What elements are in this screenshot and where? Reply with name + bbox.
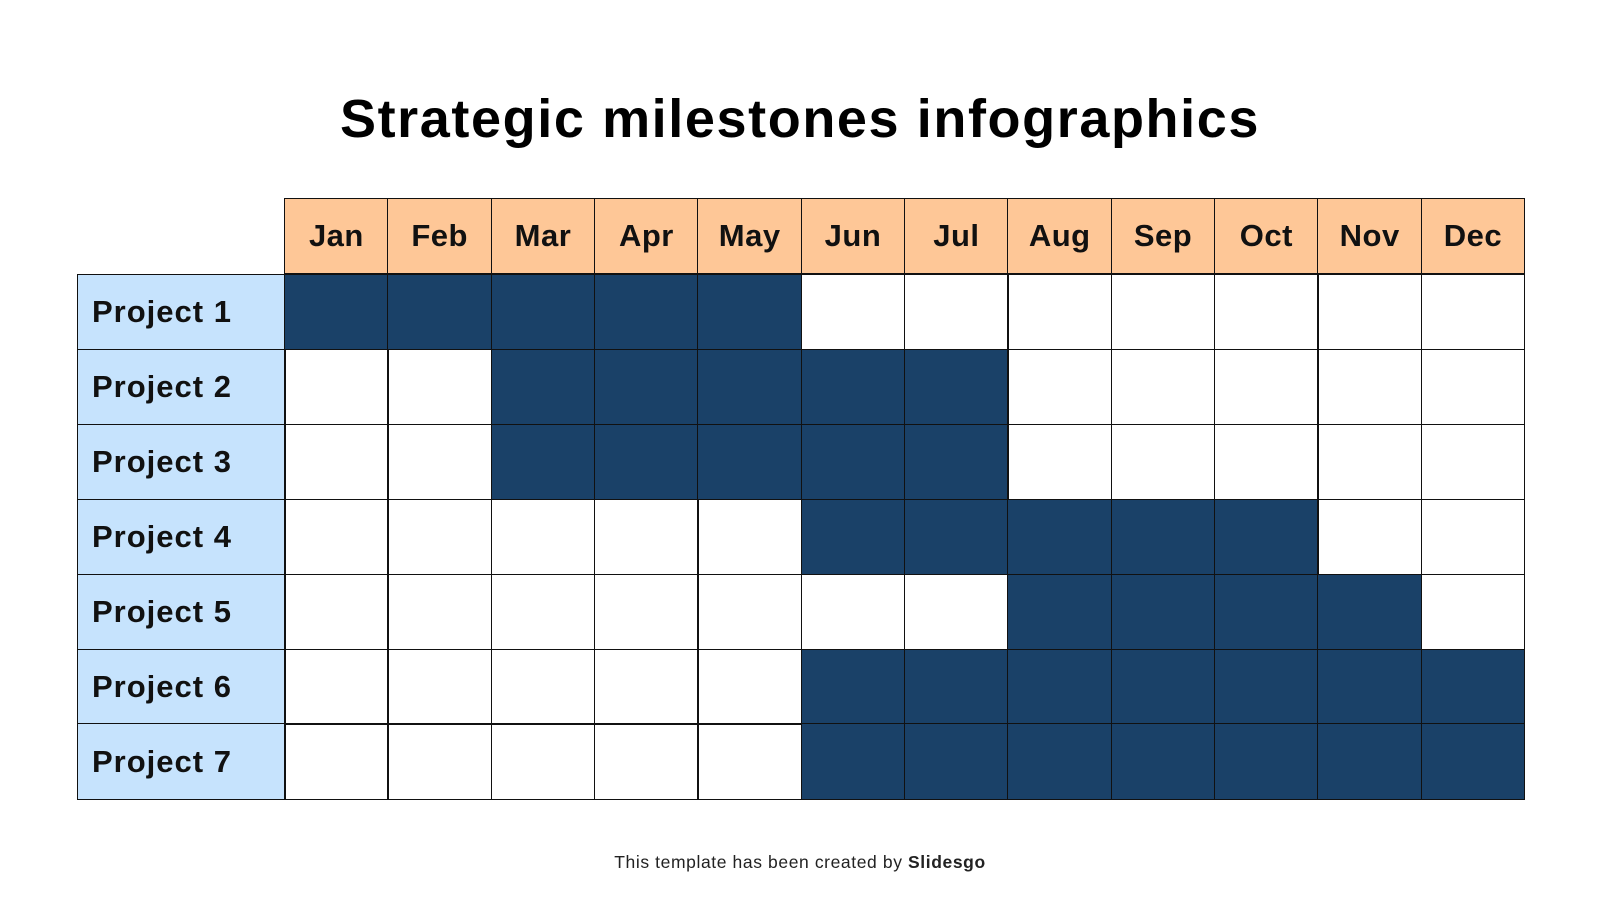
row: project 3 xyxy=(77,425,1525,499)
month header row: Jul xyxy=(933,218,980,253)
row: project 5: Project 5 xyxy=(92,594,232,629)
month header row: Apr xyxy=(619,218,674,253)
row: project 1 xyxy=(77,274,1525,349)
month header row: May xyxy=(719,218,781,253)
row: project 6: Project 6 xyxy=(92,669,232,704)
row: project 1: Project 1 xyxy=(92,294,232,329)
month header row: Nov xyxy=(1340,218,1400,253)
row: project 7: Project 7 xyxy=(92,744,232,779)
title: Strategic milestones infographics xyxy=(340,89,1260,149)
row: project 4 xyxy=(77,500,1525,574)
month header row xyxy=(284,198,1525,274)
row: project 3: Project 3 xyxy=(92,444,232,479)
row: project 4: Project 4 xyxy=(92,519,232,554)
month header row: Feb xyxy=(411,218,468,253)
row: project 2: Project 2 xyxy=(92,369,232,404)
row: project 2 xyxy=(77,350,1525,424)
month header row: Sep xyxy=(1134,218,1192,253)
month header row: Aug xyxy=(1029,218,1091,253)
month header row: Mar xyxy=(515,218,571,253)
row: project 7 xyxy=(77,723,1525,800)
month header row: Dec xyxy=(1444,218,1502,253)
month header row: Jan xyxy=(309,218,364,253)
gantt table xyxy=(77,198,1525,800)
footer credit: This template has been created by Slidesgo xyxy=(614,852,986,872)
month header row: Jun xyxy=(825,218,881,253)
row: project 5 xyxy=(77,575,1525,649)
row: project 6 xyxy=(77,650,1525,725)
month header row: Oct xyxy=(1240,218,1293,253)
